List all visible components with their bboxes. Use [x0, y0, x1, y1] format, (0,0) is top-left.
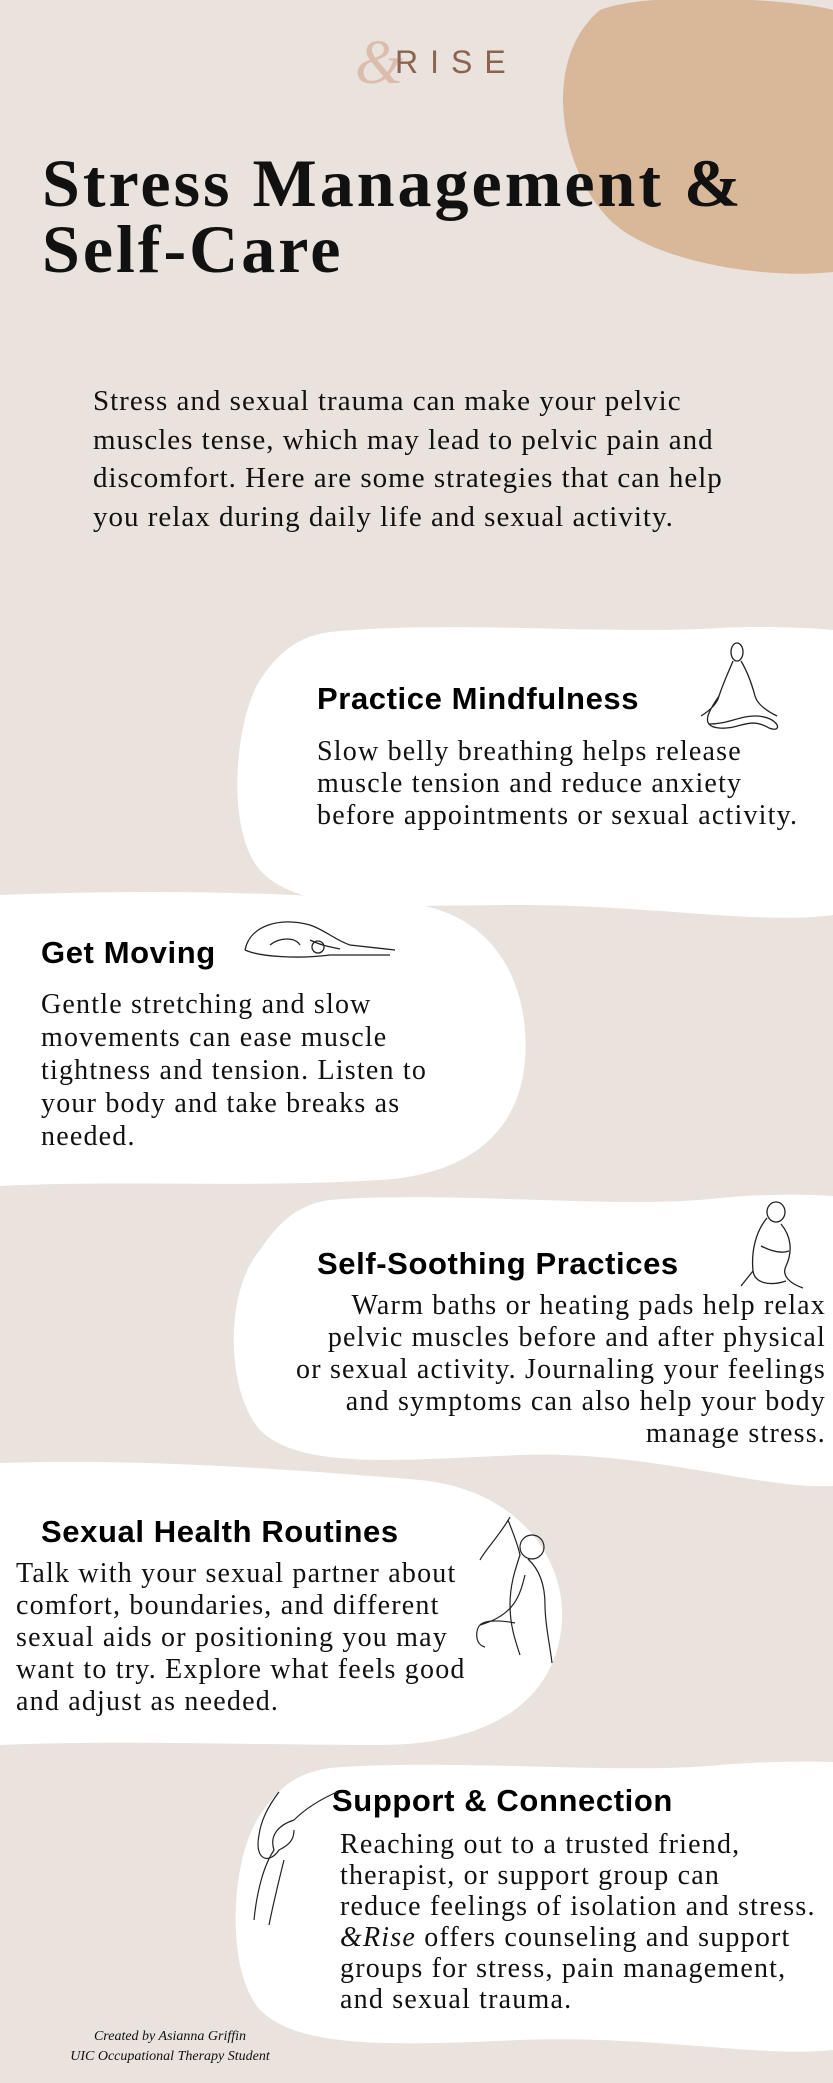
body text: comfort, boundaries, and different: [16, 1590, 440, 1621]
panel: support & connection: [253, 1783, 816, 2015]
intro text: Stress and sexual trauma can make your pelvic: [93, 385, 682, 417]
body text: muscle tension and reduce anxiety: [317, 768, 742, 799]
body text: Slow belly breathing helps release: [317, 736, 742, 767]
icon: embracing couple: [476, 1516, 553, 1664]
body text: reduce feelings of isolation and stress.: [340, 1891, 816, 1922]
title: Self-Care: [42, 211, 343, 287]
panel blob: mindfulness: [237, 627, 833, 918]
body text: your body and take breaks as: [41, 1088, 400, 1119]
logo: [355, 29, 518, 97]
body text: Warm baths or heating pads help relax: [352, 1290, 826, 1321]
intro text: you relax during daily life and sexual activity.: [93, 500, 674, 532]
body text: and symptoms can also help your body: [346, 1386, 826, 1417]
blob: top right tan: [563, 0, 833, 274]
title: Stress Management &: [42, 145, 744, 221]
body text: or sexual activity. Journaling your feelings: [296, 1354, 826, 1385]
body text: before appointments or sexual activity.: [317, 800, 798, 831]
body text: Reaching out to a trusted friend,: [340, 1829, 740, 1860]
body text: [16, 1558, 466, 1717]
icon: seated figure: [740, 1201, 804, 1289]
logo: &: [355, 29, 403, 97]
body text: [296, 1290, 826, 1449]
footer credit: Created by Asianna Griffin: [94, 2029, 246, 2044]
intro text: [93, 385, 723, 532]
body text: want to try. Explore what feels good: [16, 1654, 466, 1685]
body text: Gentle stretching and slow: [41, 989, 372, 1020]
heading: Self-Soothing Practices: [317, 1246, 679, 1281]
body text: needed.: [41, 1121, 136, 1152]
body text: movements can ease muscle: [41, 1022, 387, 1053]
panel: practice mindfulness: [317, 642, 798, 831]
heading: Support & Connection: [332, 1783, 673, 1818]
panel blob: soothing: [234, 1195, 833, 1486]
intro text: muscles tense, which may lead to pelvic pain and: [93, 424, 714, 456]
footer credit: UIC Occupational Therapy Student: [70, 2049, 270, 2064]
panel blob: moving: [0, 892, 526, 1186]
panel: sexual health routines: [16, 1514, 553, 1717]
body text: [317, 736, 798, 831]
heading: Get Moving: [41, 935, 216, 970]
body text: and adjust as needed.: [16, 1686, 279, 1717]
body text: Talk with your sexual partner about: [16, 1558, 456, 1589]
intro text: discomfort. Here are some strategies that can help: [93, 462, 723, 494]
body text: [340, 1829, 816, 2015]
icon: holding hands: [253, 1792, 337, 1925]
body text: manage stress.: [646, 1418, 826, 1449]
panel: get moving: [41, 921, 427, 1152]
icon: child pose figure: [244, 921, 396, 958]
panel blob: support: [236, 1762, 833, 2052]
title: [42, 145, 744, 287]
body text: therapist, or support group can: [340, 1860, 720, 1891]
heading: Practice Mindfulness: [317, 681, 639, 716]
footer credit: [70, 2029, 270, 2064]
body text: pelvic muscles before and after physical: [328, 1322, 826, 1353]
heading: Sexual Health Routines: [41, 1514, 399, 1549]
panel: self-soothing practices: [296, 1201, 826, 1449]
body text: &Rise offers counseling and support: [340, 1922, 791, 1953]
body text: groups for stress, pain management,: [340, 1953, 786, 1984]
body text: [41, 989, 427, 1152]
panel blob: routines: [0, 1462, 562, 1745]
icon: meditating figure: [700, 642, 778, 730]
body text: and sexual trauma.: [340, 1984, 572, 2015]
body text: tightness and tension. Listen to: [41, 1055, 427, 1086]
logo: RISE: [395, 44, 518, 80]
body text: sexual aids or positioning you may: [16, 1622, 448, 1653]
